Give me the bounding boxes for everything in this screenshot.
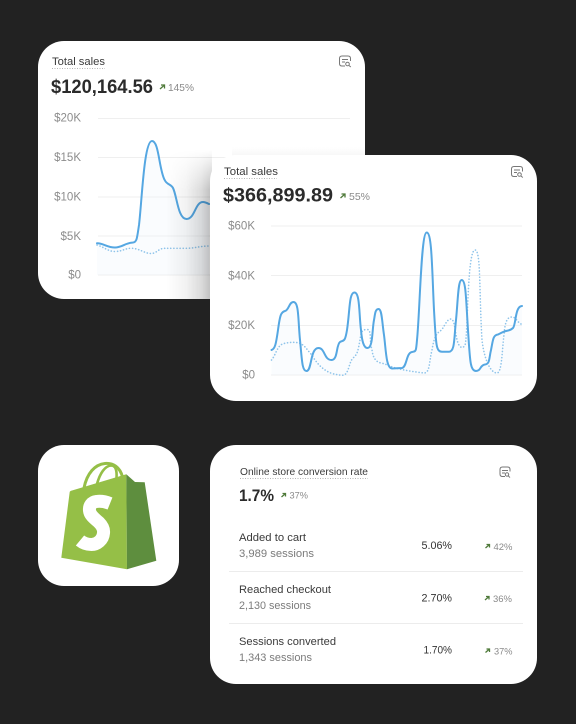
row: sessions converted: 37% [494,646,513,658]
row: added to cart: 5.06% [422,540,452,552]
value: 1.7%: 1.7% [239,486,274,505]
icon: report search [340,56,351,67]
row: sessions converted: 1.70% [424,644,452,656]
row: reached checkout [239,584,513,612]
row: sessions converted: 1,343 sessions [239,652,312,664]
trend: up 55%: 55% [349,191,370,203]
row: added to cart: 3,989 sessions [239,548,314,560]
value: 366,899.89: $366,899.89 [223,184,333,206]
heading: conversion rate: Online store conversion rate [240,466,368,478]
trend: up 145%: 145% [168,82,194,94]
row: reached checkout: 36% [493,594,513,605]
line chart: total sales 120K: $10K [54,192,81,204]
icon: shopify bag [61,463,156,569]
panel: total sales front card [210,155,537,401]
panel: shopify logo tile [38,445,179,586]
row: sessions converted [239,636,513,664]
icon: report search [500,467,510,478]
line chart: total sales 366K: $20K [228,320,255,332]
line chart: total sales 120K [54,112,370,300]
infographic canvas [38,41,537,684]
line chart: total sales 366K: $60K [228,220,255,232]
line chart: total sales 366K [228,220,522,382]
row: added to cart [239,532,513,560]
row: reached checkout: 2,130 sessions [239,600,311,612]
line chart: total sales 120K: $15K [54,152,81,164]
row: reached checkout: 2.70% [422,592,452,604]
trend: up 37%: 37% [290,490,309,502]
row: added to cart: 42% [494,542,513,553]
panel: online store conversion rate [210,445,537,684]
panel: total sales back card [38,41,370,300]
line chart: total sales 120K: $5K [61,231,81,243]
line chart: total sales 120K: $0 [68,270,81,282]
icon: report search [512,166,523,178]
line chart: total sales 120K: $20K [54,112,81,124]
value: 120,164.56: $120,164.56 [51,77,153,98]
line chart: total sales 366K: $40K [228,270,255,282]
heading: total sales: Total sales [224,166,279,178]
row: reached checkout: Reached checkout [239,584,331,596]
heading: total sales: Total sales [52,56,105,68]
row: sessions converted: Sessions converted [239,636,336,648]
row: added to cart: Added to cart [239,532,306,544]
line chart: total sales 366K: $0 [242,370,255,382]
